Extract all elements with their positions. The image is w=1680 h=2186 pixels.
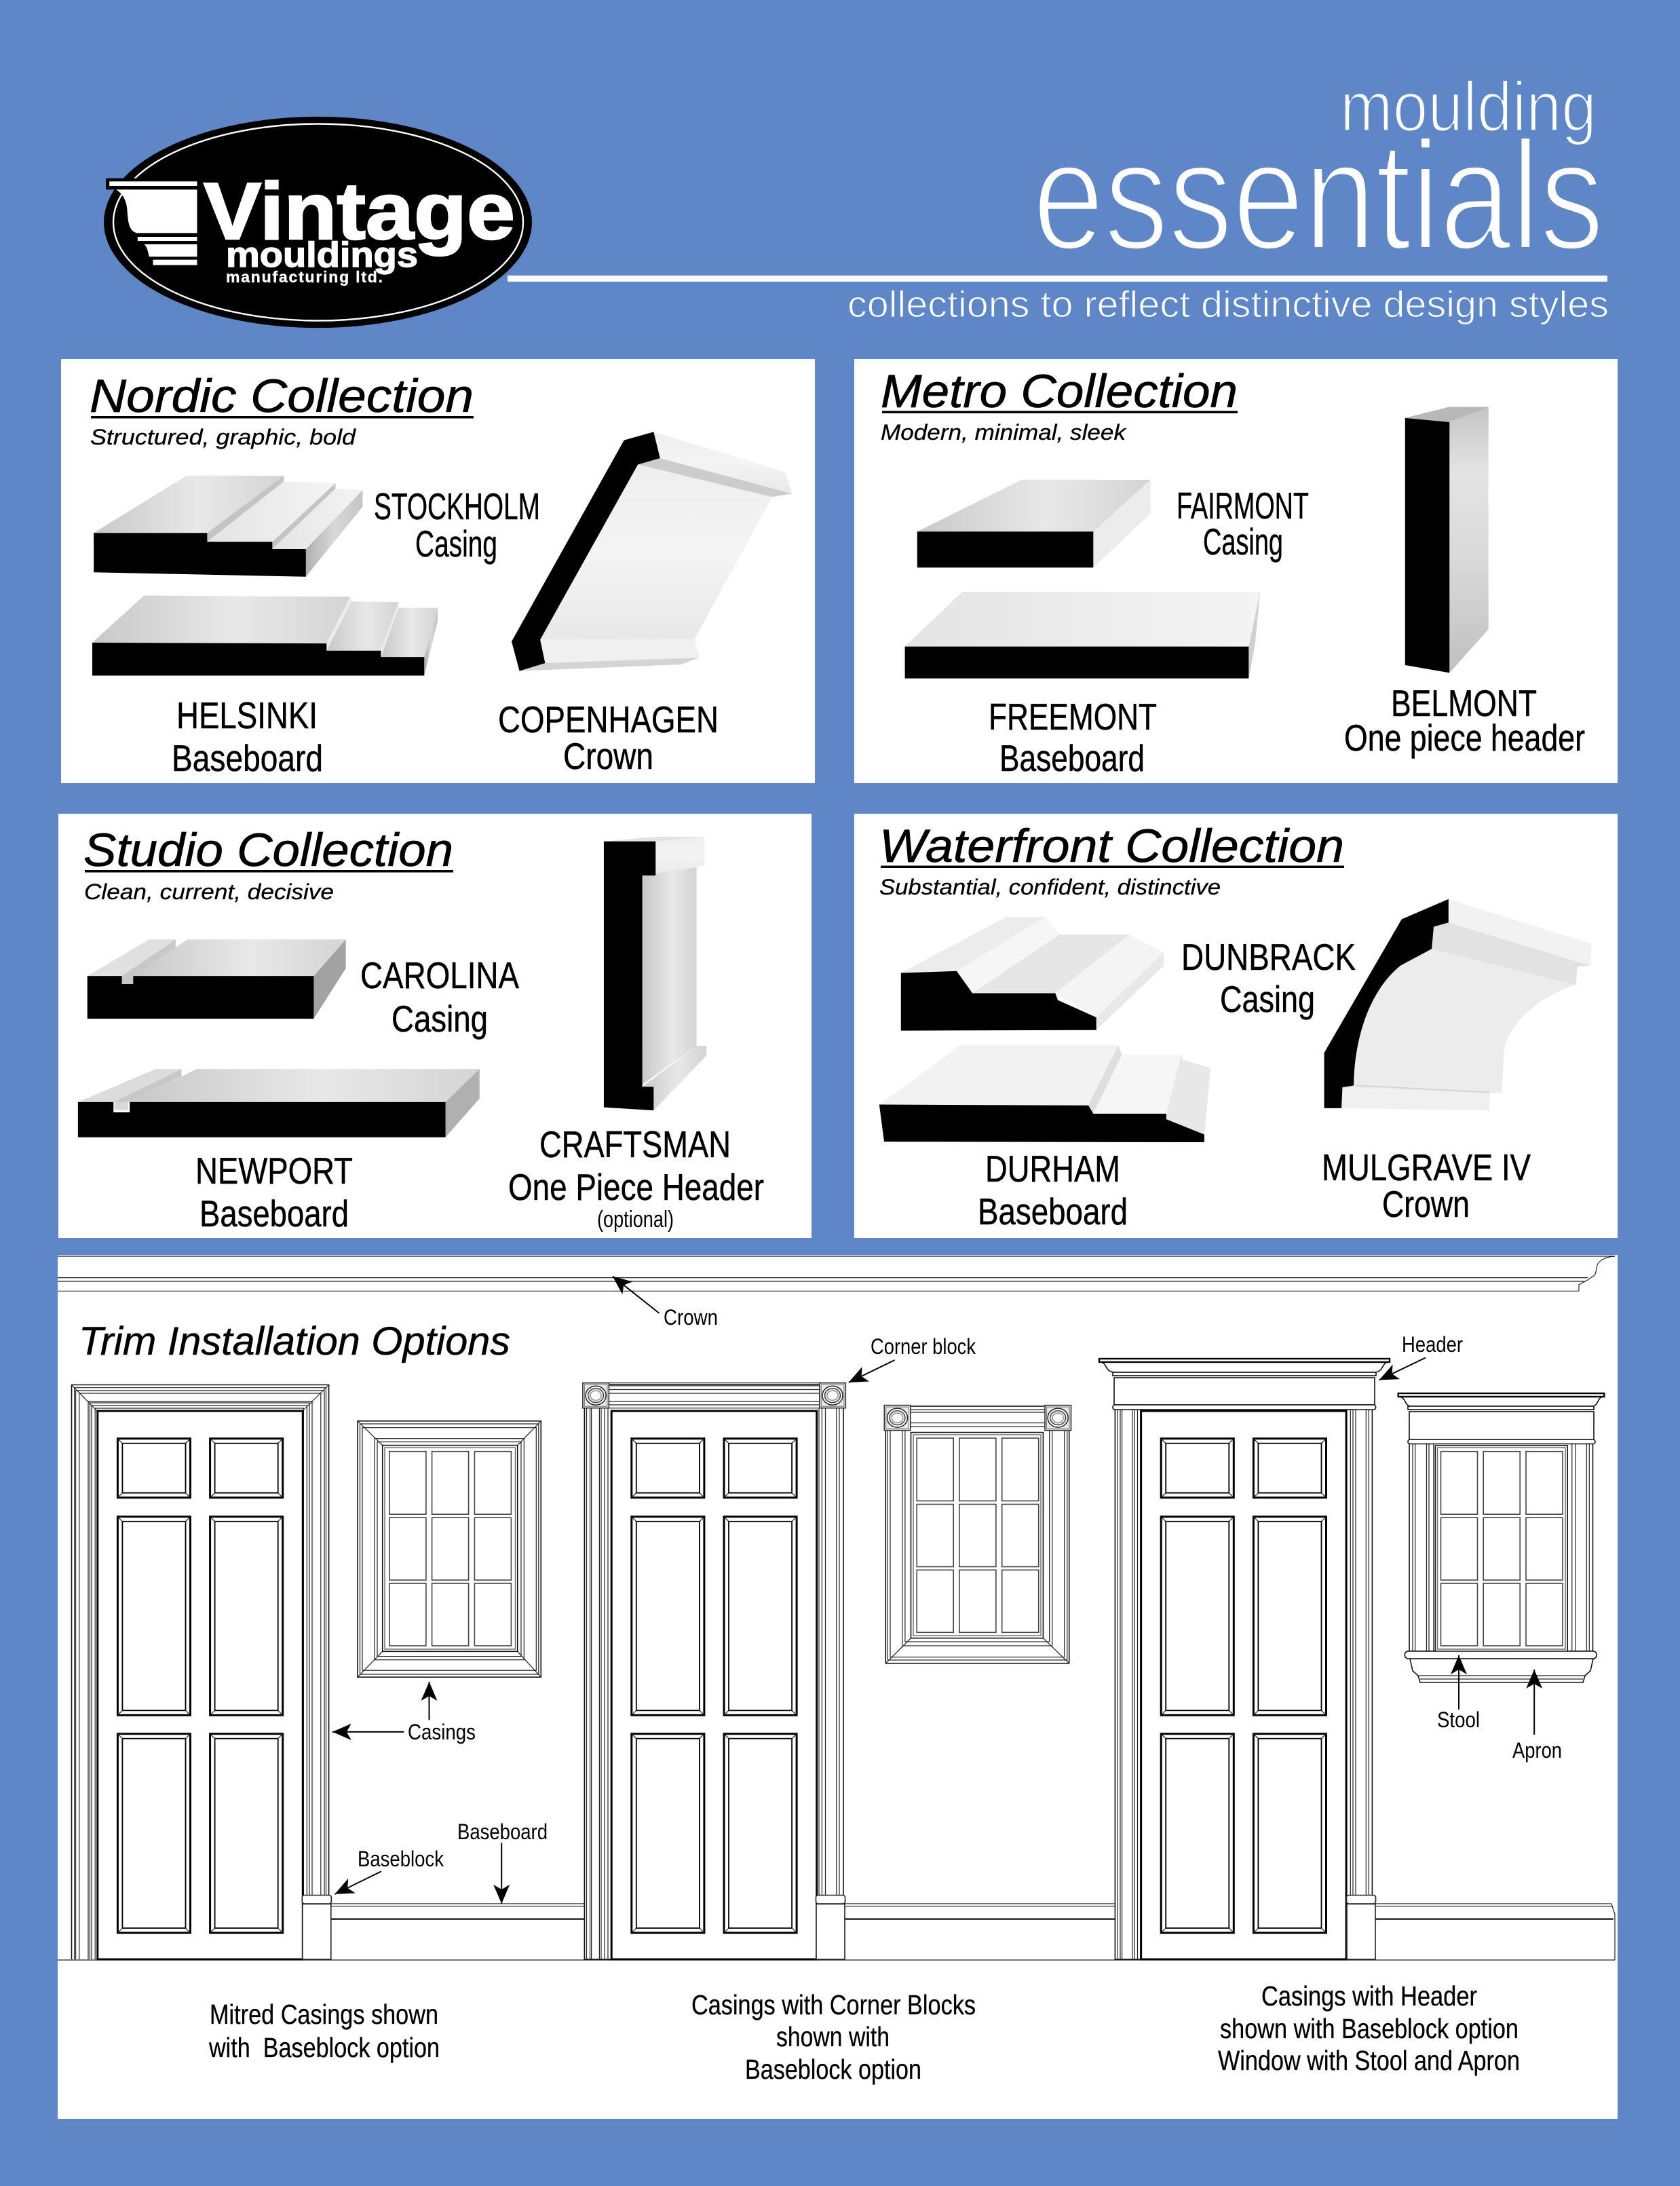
- arrow and label: Header: [1379, 1332, 1463, 1380]
- subtitle: Modern, minimal, sleek: [881, 420, 1127, 445]
- panel: Metro Collection: [854, 359, 1618, 783]
- panel: Nordic Collection: [61, 359, 815, 783]
- label: Carolina: CAROLINA: [360, 954, 519, 996]
- moulding: Mulgrave IV crown: [1324, 899, 1592, 1110]
- door 3: header casing: [1099, 1359, 1390, 1959]
- label: Casing: Casing: [1220, 978, 1315, 1020]
- moulding: Helsinki baseboard: [92, 596, 438, 676]
- label: Casing: Casing: [1203, 521, 1283, 563]
- caption: mitred casings: Mitred Casings shown: [210, 1999, 438, 2030]
- arrow and label: Stool: Stool: [1437, 1708, 1480, 1732]
- logo wordmark: Vintage: Vintage: [204, 166, 515, 257]
- label: Casing: Casing: [415, 523, 497, 565]
- window 3: header, stool and apron: [1398, 1393, 1604, 1682]
- label: Fairmont: FAIRMONT: [1177, 485, 1309, 527]
- label: Baseboard: Baseboard: [172, 737, 323, 779]
- floor line: [58, 1959, 1615, 1961]
- logo wordmark: mouldings: mouldings: [226, 235, 418, 275]
- moulding: Belmont header: [1405, 407, 1489, 673]
- title: Waterfront Collection: [879, 820, 1344, 872]
- title underline: [881, 866, 1344, 868]
- label: Crown: Crown: [563, 735, 653, 777]
- arrow and label: Baseblock: Baseblock: [358, 1847, 444, 1871]
- label: Craftsman: CRAFTSMAN: [539, 1123, 731, 1165]
- arrow and label: Baseblock: [335, 1847, 444, 1894]
- title underline: [882, 411, 1238, 413]
- one piece header: [1099, 1359, 1390, 1410]
- moulding: Stockholm casing: [94, 476, 362, 577]
- moulding: Craftsman header: [604, 837, 706, 1110]
- caption: corner blocks: shown with: [776, 2021, 890, 2052]
- moulding: Carolina casing: [88, 939, 346, 1019]
- arrows and label: Casings: Casings: [408, 1720, 476, 1744]
- arrow and label: Stool: [1437, 1655, 1480, 1732]
- label: One Piece Header: One Piece Header: [508, 1166, 764, 1208]
- arrow and label: Apron: Apron: [1512, 1738, 1562, 1763]
- label: Crown: Crown: [1382, 1183, 1470, 1225]
- moulding: Fairmont casing: [917, 480, 1151, 567]
- caption: header: Window with Stool and Apron: [1218, 2045, 1520, 2076]
- moulding: Durham baseboard: [879, 1045, 1210, 1142]
- caption: corner blocks: Casings with Corner Blocks: [691, 1989, 976, 2020]
- panel: Waterfront Collection: [854, 814, 1618, 1238]
- crown moulding line drawing: [58, 1256, 1615, 1291]
- panel: Trim Installation Options: [58, 1255, 1618, 2119]
- label: optional: (optional): [597, 1207, 674, 1232]
- label: Durham: DURHAM: [985, 1148, 1120, 1190]
- caption: corner blocks: Baseblock option: [745, 2054, 921, 2085]
- window 2: corner block casing: [884, 1406, 1071, 1663]
- label: Baseboard: Baseboard: [978, 1190, 1128, 1232]
- arrow and label: Baseboard: Baseboard: [457, 1820, 548, 1844]
- panel: Studio Collection: [58, 814, 812, 1238]
- label: Helsinki: HELSINKI: [176, 694, 318, 736]
- title underline: [91, 416, 474, 418]
- moulding: Copenhagen crown: [512, 432, 792, 671]
- heading: moulding: moulding: [1340, 68, 1597, 147]
- tagline: collections to reflect distinctive design styles: [847, 283, 1609, 325]
- title: Studio Collection: [83, 824, 453, 876]
- title: Metro Collection: [881, 365, 1238, 417]
- caption: header: shown with Baseblock option: [1220, 2013, 1519, 2044]
- title: Nordic Collection: [90, 370, 474, 422]
- label: Baseboard: Baseboard: [199, 1192, 349, 1235]
- window 1: mitred casing: [358, 1421, 541, 1677]
- arrow and label: Apron: [1512, 1670, 1562, 1763]
- title underline: [85, 870, 453, 873]
- subtitle: Structured, graphic, bold: [90, 425, 356, 449]
- label: Stockholm: STOCKHOLM: [374, 485, 540, 527]
- caption: mitred casings: with Baseblock option: [208, 2032, 440, 2063]
- label: Copenhagen: COPENHAGEN: [498, 698, 719, 740]
- door 1: mitred casing: [72, 1384, 331, 1959]
- label: Dunbrack: DUNBRACK: [1181, 936, 1356, 978]
- arrow and label: Baseboard: [457, 1820, 548, 1904]
- label: One piece header: One piece header: [1344, 717, 1585, 759]
- label: Belmont: BELMONT: [1391, 682, 1537, 724]
- arrow and label: Corner block: [849, 1334, 976, 1382]
- arrow and label: Header: Header: [1402, 1332, 1463, 1357]
- logo wordmark: manufacturing ltd.: manufacturing ltd.: [226, 268, 383, 286]
- arrow and label: Corner block: Corner block: [871, 1334, 976, 1359]
- caption: corner blocks: [691, 1989, 976, 2085]
- baseboards: [331, 1904, 1615, 1960]
- title: Trim Installation Options: [79, 1319, 510, 1363]
- label: Mulgrave IV: MULGRAVE IV: [1322, 1146, 1531, 1188]
- arrow and label: Crown: [613, 1276, 718, 1330]
- subtitle: Clean, current, decisive: [84, 880, 334, 904]
- logo: Vintage Mouldings oval: [104, 117, 532, 328]
- caption: header: [1218, 1980, 1520, 2076]
- moulding: Dunbrack casing: [901, 917, 1164, 1031]
- icon: crown moulding profile: [106, 178, 197, 265]
- subtitle: Substantial, confident, distinctive: [879, 875, 1221, 899]
- label: Freemont: FREEMONT: [989, 696, 1157, 738]
- header rule: [508, 276, 1607, 282]
- label: Newport: NEWPORT: [195, 1150, 353, 1192]
- moulding: Freemont baseboard: [905, 592, 1260, 679]
- label: Casing: Casing: [392, 998, 488, 1040]
- caption: header: Casings with Header: [1261, 1980, 1477, 2012]
- caption: mitred casings: [208, 1999, 440, 2063]
- label: Baseboard: Baseboard: [999, 737, 1145, 779]
- door 2: corner block casing: [583, 1383, 845, 1959]
- arrow and label: Crown: Crown: [664, 1305, 718, 1330]
- moulding: Newport baseboard: [78, 1069, 480, 1137]
